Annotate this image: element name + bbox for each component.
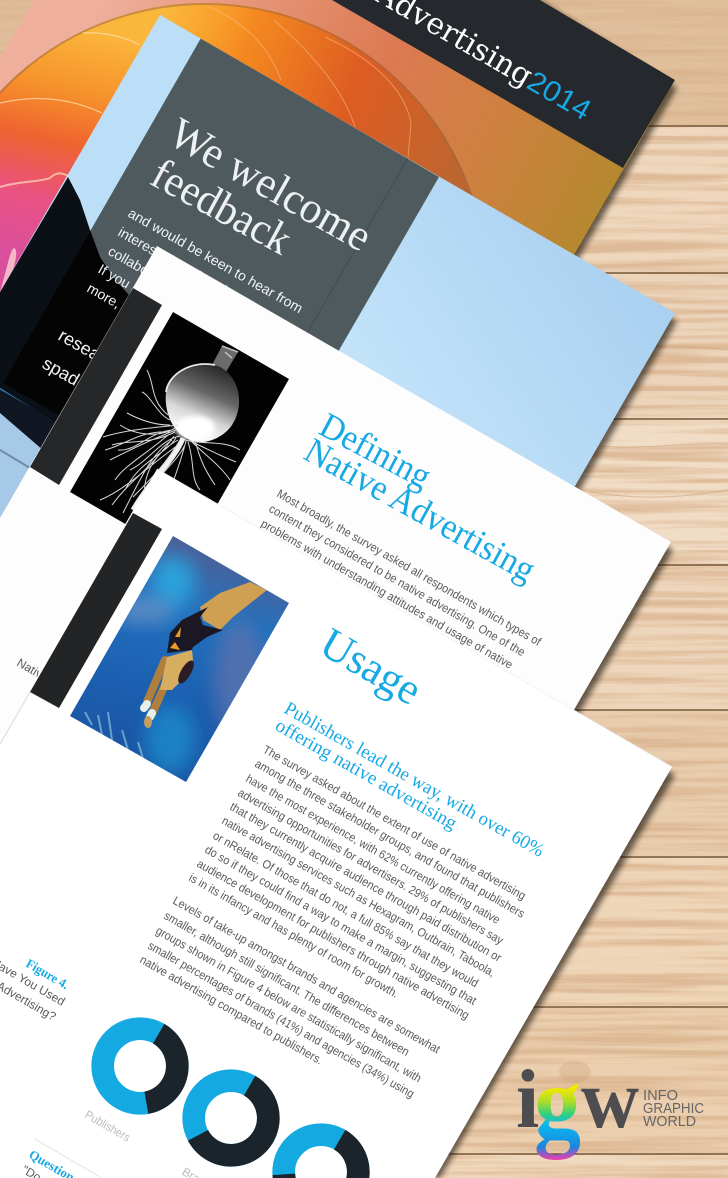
mountain silhouette bbox=[0, 177, 135, 425]
text: usage paragraph two: smaller, although still significant. The differences between bbox=[162, 908, 412, 1059]
text: usage paragraph one bbox=[187, 742, 528, 1022]
sidebar bar bbox=[30, 513, 162, 708]
sidebar bar bbox=[30, 288, 162, 485]
text: feedback invitation: spade bbox=[39, 353, 92, 395]
text: native caption fragment: Native bbox=[14, 655, 51, 685]
text: feedback invitation: and would be keen to hear from bbox=[126, 205, 306, 316]
chart: publishers donut bbox=[89, 1015, 191, 1117]
text: intro paragraph: content they considered to be native advertising. One of the bbox=[267, 501, 528, 659]
heading: we welcome feedback: We welcome bbox=[161, 108, 380, 261]
logo: infographic world bbox=[516, 1045, 704, 1160]
caption: figure 4: Figure 4. bbox=[24, 956, 72, 992]
water scene bbox=[0, 388, 56, 518]
text: usage paragraph one: is in its infancy and has plenty of room for growth. bbox=[187, 870, 401, 1001]
text: usage paragraph one: that they currently acquire audience through paid distribution or bbox=[228, 799, 504, 965]
page: defining native advertising bbox=[0, 246, 673, 790]
page: cover with orange photo bbox=[0, 0, 680, 292]
text: feedback invitation bbox=[39, 205, 306, 395]
logo letter i: i bbox=[516, 1053, 539, 1146]
text: usage paragraph one: have the most experience, with 62% currently offering native bbox=[244, 771, 503, 927]
logo wordmark bbox=[643, 1088, 704, 1130]
chart: brands donut bbox=[180, 1067, 282, 1169]
text: usage paragraph two: groups shown in Figure 4 below are statistically significant, with bbox=[154, 923, 424, 1085]
text: usage paragraph two: native advertising compared to publishers. bbox=[138, 952, 325, 1067]
logo letter g: g bbox=[534, 1045, 581, 1160]
page: we welcome feedback bbox=[0, 15, 680, 518]
text: intro paragraph: Most broadly, the survey asked all respondents which types of bbox=[275, 486, 544, 649]
text: feedback invitation: interested parties about bbox=[116, 224, 251, 310]
photo: orange fruit bbox=[0, 0, 675, 292]
text: usage paragraph one: among the three stakeholder groups, and found that publishers bbox=[253, 756, 527, 921]
heading: usage: Usage bbox=[312, 618, 430, 715]
page: usage bbox=[0, 469, 675, 1178]
text: feedback invitation: If you are interested bbox=[96, 261, 211, 336]
subheading: publishers lead: Publishers lead the way, with over 60% bbox=[281, 698, 548, 862]
text: usage paragraph two: Levels of take-up amongst brands and agencies are somewhat bbox=[171, 893, 443, 1057]
text: feedback invitation: more, please visit bbox=[85, 280, 187, 347]
text: usage paragraph one: native advertising services such as Hexagram, Outbrain, Taboola, bbox=[220, 813, 498, 980]
subheading: publishers lead: offering native advertising bbox=[272, 715, 461, 835]
photo: diver bbox=[70, 536, 289, 782]
text: usage paragraph two: smaller percentages of brands (41%) and agencies (34%) using bbox=[146, 938, 417, 1101]
label: publishers: Publishers bbox=[82, 1107, 133, 1145]
text: feedback invitation: collaboration and more bbox=[106, 243, 238, 327]
logo wordmark: WORLD bbox=[643, 1114, 696, 1130]
heading: defining native advertising: Native Advertising bbox=[298, 430, 542, 590]
logo wordmark: INFO bbox=[643, 1088, 678, 1104]
dark translucent panel bbox=[90, 38, 439, 351]
photo: glass bulb with roots bbox=[70, 312, 289, 524]
text: usage paragraph one: or nRelate. Of those that do not, a full 85% say that they would bbox=[211, 828, 481, 990]
text: usage paragraph one: audience development for publishers through native advertising bbox=[195, 856, 472, 1022]
text: usage paragraph one: advertising opportunities for advertisers. 29% of publishers say bbox=[236, 785, 506, 947]
chart: agencies donut bbox=[270, 1121, 372, 1178]
heading: defining native advertising: Defining bbox=[313, 405, 438, 496]
diver figure bbox=[144, 582, 267, 728]
text: report year: 2014 bbox=[522, 65, 596, 127]
heading: we welcome feedback: feedback bbox=[143, 149, 300, 264]
text: usage paragraph one: do so if they could find a way to make a margin, suggesting that bbox=[203, 842, 479, 1008]
logo letter w: w bbox=[581, 1053, 639, 1146]
text: usage paragraph one: The survey asked about the extent of use of native advertising bbox=[261, 742, 528, 903]
text: intro paragraph: problems with understanding attitudes and usage of native bbox=[259, 516, 516, 672]
logo wordmark: GRAPHIC bbox=[643, 1101, 704, 1117]
text: feedback invitation: research bbox=[55, 325, 126, 377]
